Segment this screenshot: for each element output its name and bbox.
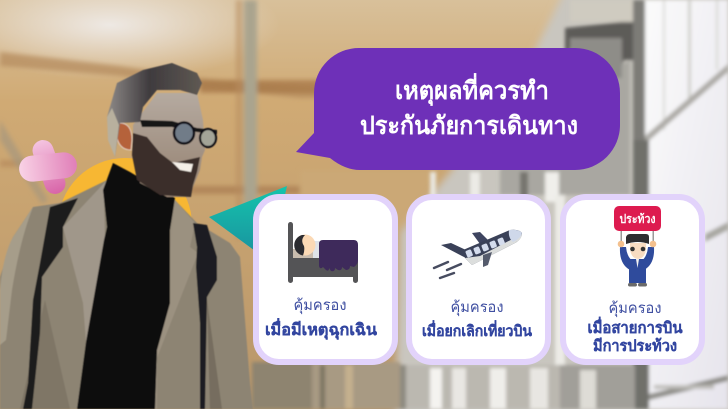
backpack straps xyxy=(23,198,78,409)
coat xyxy=(0,180,253,409)
teeth xyxy=(172,162,193,172)
panel: flight cancellation xyxy=(409,197,548,362)
label: covers: คุ้มครอง xyxy=(608,300,662,318)
heading text: เหตุผลที่ควรทำ xyxy=(395,73,549,107)
icon: protester holding sign: ประท้วง xyxy=(620,212,656,226)
hair xyxy=(107,63,202,157)
decorative teal triangle xyxy=(209,186,287,262)
right lapel xyxy=(150,200,198,409)
label: airline has strike: เมื่อสายการบิน xyxy=(588,316,683,337)
label: emergency: เมื่อมีเหตุฉุกเฉิน xyxy=(265,318,377,340)
label: covers: คุ้มครอง xyxy=(294,297,346,315)
ear xyxy=(117,123,132,150)
speech bubble heading xyxy=(296,48,620,170)
glasses xyxy=(140,120,217,147)
decorative yellow circle xyxy=(58,158,192,292)
panel: airline strike xyxy=(563,197,702,362)
icon: protester holding sign xyxy=(614,206,661,286)
panel: emergency cover xyxy=(256,197,395,362)
face xyxy=(133,93,205,197)
label: strike line two: มีการประท้วง xyxy=(593,337,677,355)
left lapel xyxy=(63,180,107,342)
decorative pink plus xyxy=(18,137,78,197)
beard xyxy=(132,133,200,197)
label: flight cancellation: เมื่อยกเลิกเที่ยวบิน xyxy=(422,320,533,340)
label: covers: คุ้มครอง xyxy=(450,299,504,317)
black turtleneck xyxy=(77,163,175,409)
icon: person in bed xyxy=(288,222,358,283)
heading text: ประกันภัยการเดินทาง xyxy=(360,112,578,140)
icon: airplane taking off xyxy=(434,230,522,278)
photo: smiling man with glasses and coat xyxy=(0,63,253,409)
heading text xyxy=(360,73,578,140)
